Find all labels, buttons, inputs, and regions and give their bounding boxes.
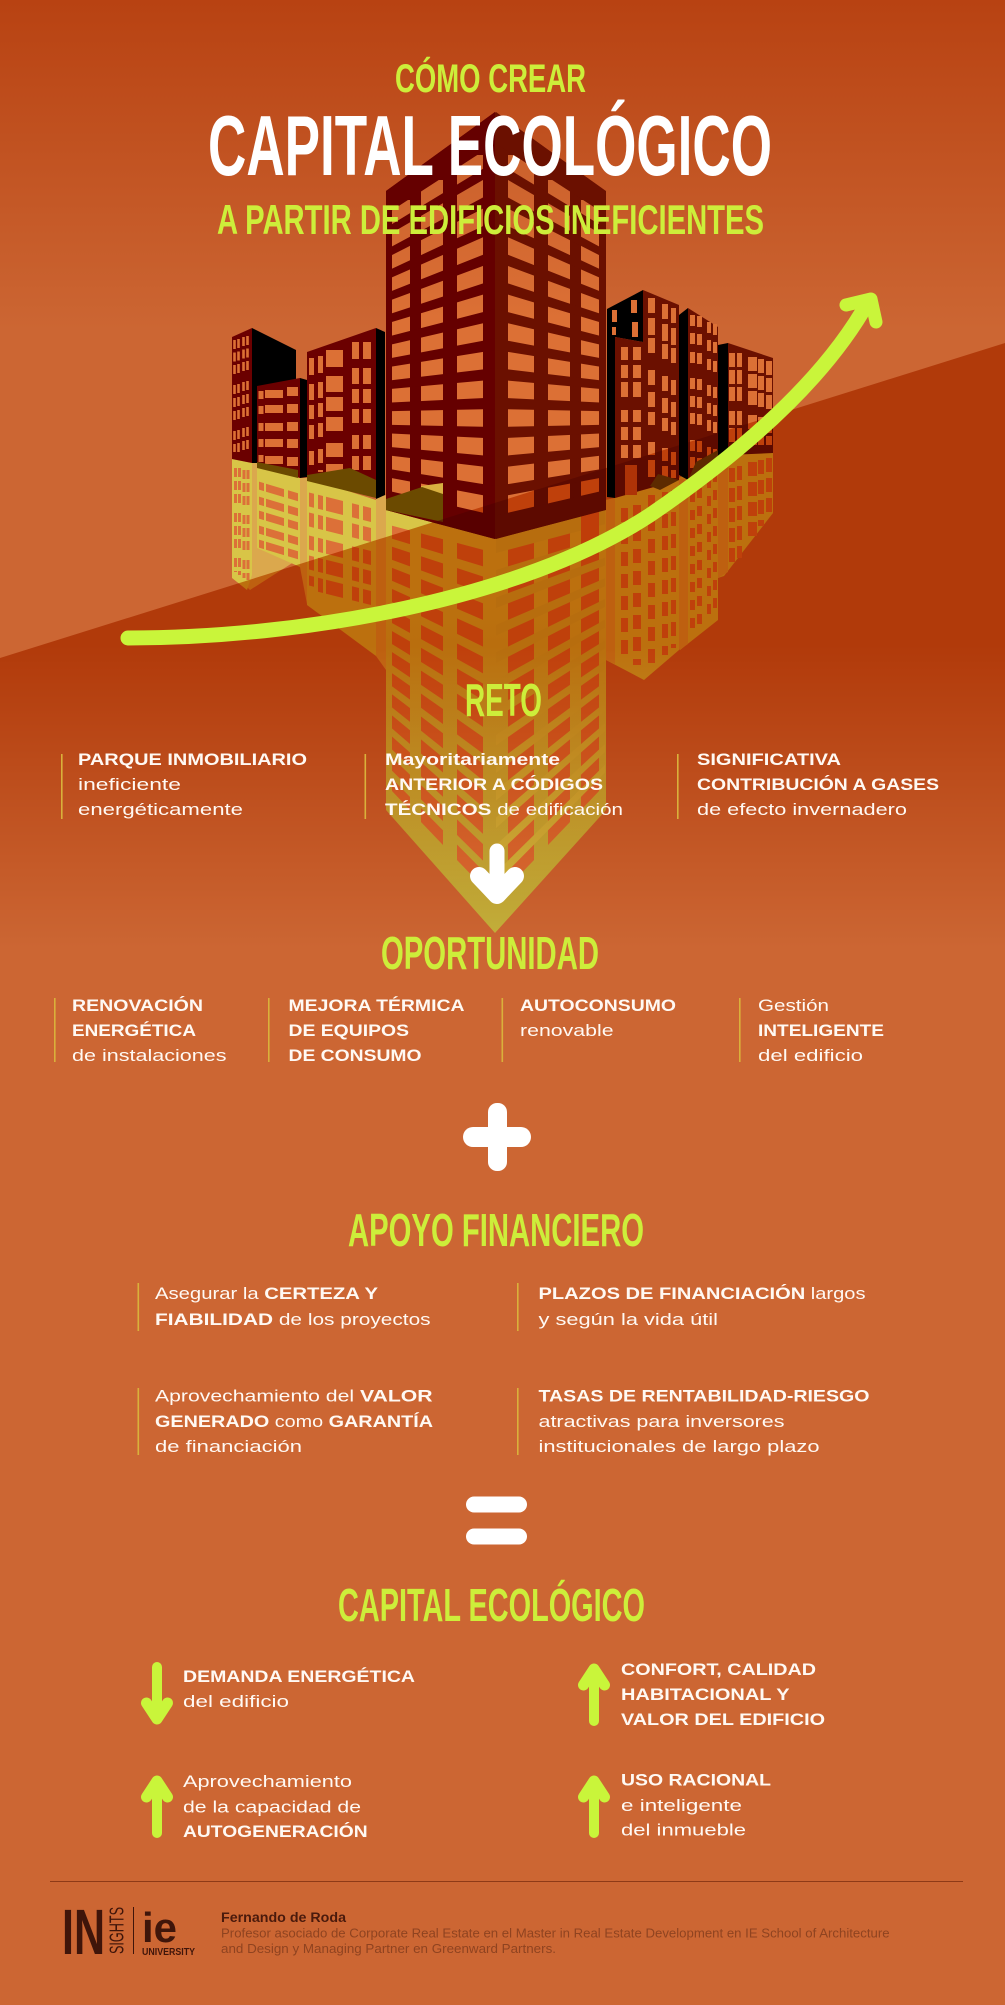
result item 4: del inmueble [621,1822,746,1840]
oportunidad item 3: renovable [520,1022,614,1040]
result item 3: Aprovechamiento [183,1773,352,1791]
result item 4: USO RACIONAL [621,1772,771,1790]
dark diagonal overlay [0,343,1005,950]
building: far left tower [232,328,296,463]
building: left mid block [307,328,385,499]
apoyo item 1 [138,1283,431,1331]
building: right block one [607,290,679,498]
apoyo item 3: GENERADO como GARANTÍA [155,1412,433,1431]
apoyo item 3: de financiación [155,1438,302,1456]
result item 1: del edificio [183,1693,289,1711]
reflection: right buildings [606,445,773,680]
icon: arrow down [146,1667,168,1719]
oportunidad item 4: Gestión [758,997,829,1015]
reto item 2: TÉCNICOS de edificación [385,800,623,819]
apoyo item 2: y según la vida útil [538,1311,718,1329]
apoyo item 1: FIABILIDAD de los proyectos [155,1311,431,1329]
title line 3: A PARTIR DE EDIFICIOS INEFICIENTES [217,196,764,243]
oportunidad item 1: ENERGÉTICA [72,1021,196,1040]
reto item 1: energéticamente [78,801,243,819]
building: tower base shadow [386,483,443,522]
reto item 2: ANTERIOR A CÓDIGOS [385,775,603,794]
building: right block two [679,308,718,480]
logo: ie university: ie [142,1904,177,1951]
panel: reto [61,751,939,819]
result item 1: DEMANDA ENERGÉTICA [183,1667,415,1686]
result item 3: AUTOGENERACIÓN [183,1822,368,1841]
reto item 3 [677,751,939,819]
apoyo item 2: PLAZOS DE FINANCIACIÓN largos [538,1284,866,1303]
arrow: white down [479,851,515,895]
reflection: central tower [386,470,606,933]
reto item 1: ineficiente [78,776,181,794]
oportunidad item 1: RENOVACIÓN [72,996,203,1015]
icon: arrow up [584,1669,604,1721]
building: right block three [718,343,773,458]
reflection: small left building [257,466,307,604]
apoyo item 3 [138,1388,433,1456]
oportunidad item 2: DE CONSUMO [288,1047,422,1065]
oportunidad item 3 [502,997,676,1062]
oportunidad item 2 [268,996,465,1065]
reto item 3: de efecto invernadero [697,801,907,819]
illustration: buildings [232,112,773,539]
heading: reto: RETO [465,674,542,726]
apoyo item 3: Aprovechamiento del VALOR [155,1388,433,1406]
icon: plus [463,1103,531,1171]
apoyo item 4: institucionales de largo plazo [538,1438,820,1456]
title [208,55,772,243]
reto item 1 [61,751,307,819]
building: small left block [257,378,307,478]
building: central tower [386,112,606,539]
icon: arrow up [584,1781,604,1833]
panel: oportunidad [54,996,884,1065]
heading: oportunidad: OPORTUNIDAD [381,927,599,979]
apoyo item 2 [517,1283,866,1331]
result item 1 [146,1667,415,1719]
oportunidad item 3: AUTOCONSUMO [520,997,676,1015]
apoyo item 1: Asegurar la CERTEZA Y [155,1285,378,1303]
heading: apoyo financiero: APOYO FINANCIERO [348,1204,644,1256]
result item 4 [584,1772,771,1840]
footer author: Fernando de Roda [221,1910,347,1925]
icon: arrow up [146,1781,168,1833]
result item 4: e inteligente [621,1797,742,1815]
title line 1: CÓMO CREAR [395,55,586,101]
result item 2: HABITACIONAL Y [621,1686,790,1704]
icon: equals [466,1496,527,1544]
panel: capital ecológico [146,1661,825,1841]
oportunidad item 2: DE EQUIPOS [288,1022,409,1040]
reflection: far left building [232,459,297,590]
reto item 2: Mayoritariamente [385,751,560,769]
footer author [221,1910,890,1956]
reto item 1: PARQUE INMOBILIARIO [78,751,307,769]
illustration: reflected buildings [232,445,773,933]
result item 2: CONFORT, CALIDAD [621,1661,816,1679]
oportunidad item 1: de instalaciones [72,1047,226,1065]
footer logos: UNIVERSITY [142,1946,195,1958]
growth arrow [128,299,876,638]
apoyo item 4: atractivas para inversores [538,1413,784,1431]
reto item 3: SIGNIFICATIVA [697,751,841,769]
heading: capital ecológico: CAPITAL ECOLÓGICO [338,1579,645,1631]
oportunidad item 1 [54,996,226,1065]
result item 2 [584,1661,825,1729]
building: olive ground shadows [257,450,718,498]
footer author: and Design y Managing Partner en Greenward Partners. [221,1942,556,1956]
reflection: left mid building [307,478,386,670]
panel: apoyo financiero [138,1283,870,1456]
result item 3: de la capacidad de [183,1798,361,1816]
footer logos: SIGHTS [106,1907,128,1954]
result item 2: VALOR DEL EDIFICIO [621,1711,825,1729]
result item 3 [146,1773,368,1841]
reto item 2 [364,751,623,819]
oportunidad item 4: INTELIGENTE [758,1022,884,1040]
reto item 3: CONTRIBUCIÓN A GASES [697,775,939,794]
apoyo item 4: TASAS DE RENTABILIDAD-RIESGO [538,1388,870,1406]
oportunidad item 4 [739,997,884,1065]
apoyo item 4 [517,1388,870,1456]
logo: insights: IN [62,1896,105,1968]
footer logos [62,1896,195,1968]
oportunidad item 2: MEJORA TÉRMICA [288,996,465,1015]
footer author: Profesor asociado de Corporate Real Estate en el Master in Real Estate Development en IE School of Architecture [221,1926,890,1940]
oportunidad item 4: del edificio [758,1047,863,1065]
